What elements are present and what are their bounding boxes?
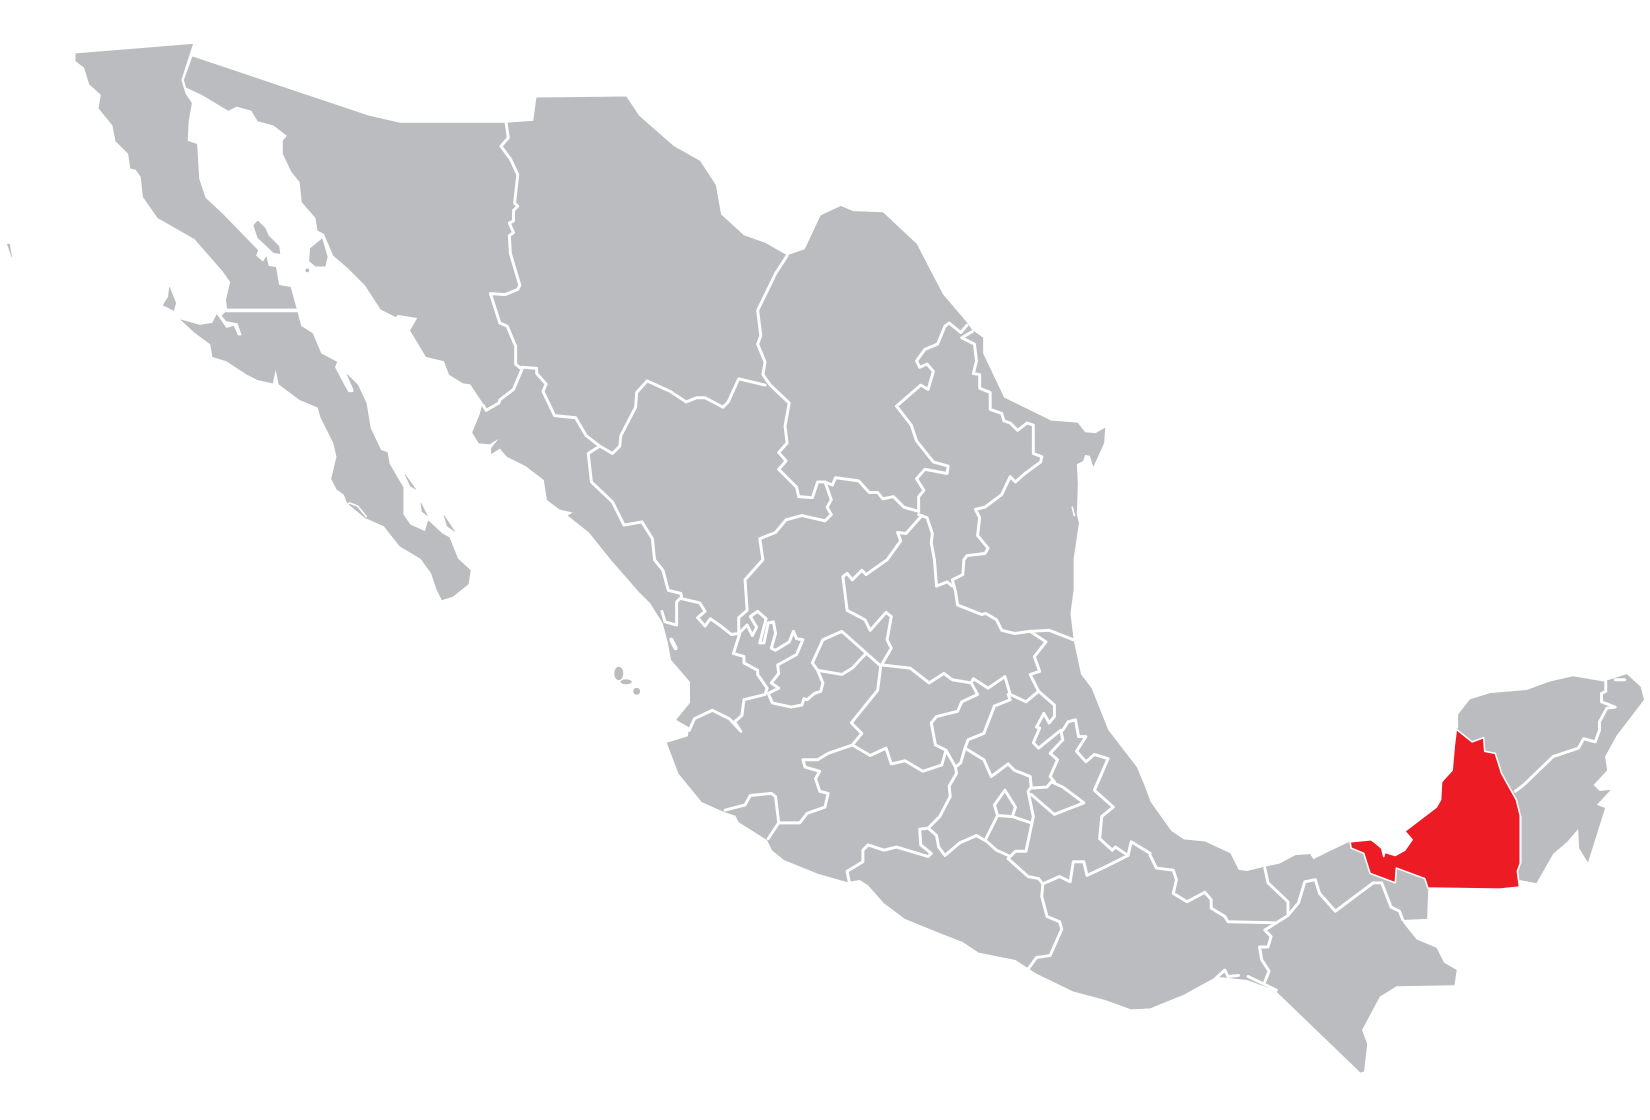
islands: [7, 221, 640, 694]
state borders: [225, 123, 1625, 990]
highlighted state: Campeche: [1350, 729, 1521, 889]
Baja California peninsula: [76, 44, 470, 600]
